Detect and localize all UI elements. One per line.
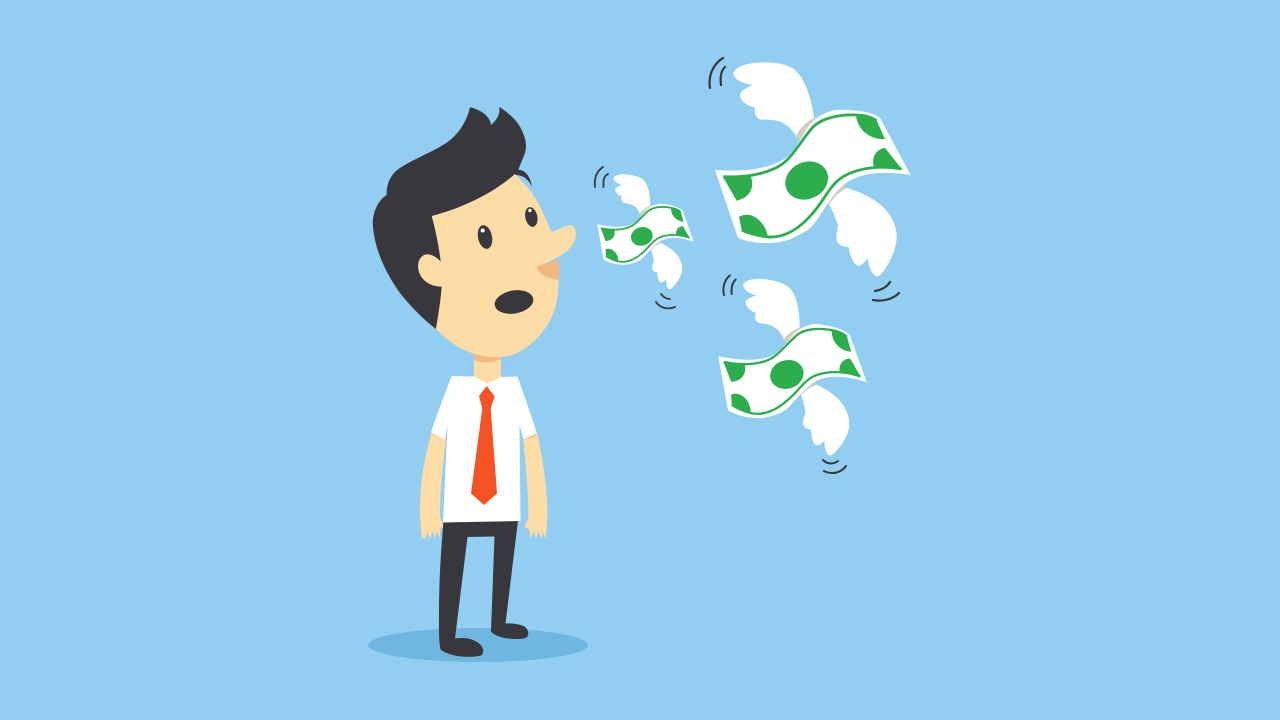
banknote paper xyxy=(592,194,699,275)
banknote centre oval xyxy=(779,154,834,207)
ground shadow xyxy=(368,628,588,662)
lower wing xyxy=(646,241,686,291)
banknote paper xyxy=(715,110,911,243)
neck shadow xyxy=(474,354,501,363)
lower wing xyxy=(793,382,855,458)
motion lines xyxy=(595,167,675,308)
wing joints xyxy=(796,118,847,206)
lower wing xyxy=(829,187,897,276)
man xyxy=(373,107,576,657)
banknote border xyxy=(717,315,867,428)
mouth xyxy=(493,287,535,317)
ear xyxy=(418,254,447,287)
banknote corners xyxy=(596,198,694,272)
banknote corners xyxy=(717,316,867,428)
wing joints xyxy=(634,205,666,252)
small flying banknote xyxy=(589,167,702,308)
nose shadow xyxy=(537,260,559,280)
hair xyxy=(373,107,526,329)
face xyxy=(432,174,576,357)
upper wing xyxy=(736,276,806,343)
banknote border xyxy=(596,198,694,272)
hair curl xyxy=(512,170,532,187)
shirt xyxy=(431,376,537,522)
upper wing xyxy=(733,62,814,138)
right eye xyxy=(523,206,539,228)
wing joints xyxy=(775,326,825,398)
motion lines xyxy=(723,276,846,473)
motion lines xyxy=(710,58,899,301)
banknote centre oval xyxy=(629,224,655,248)
trousers and shoes xyxy=(439,520,528,657)
left eye xyxy=(476,224,494,250)
sleeve shading xyxy=(431,432,537,440)
neck xyxy=(474,350,501,384)
banknote corners xyxy=(723,116,902,237)
tie xyxy=(471,386,497,505)
banknote centre oval xyxy=(767,356,807,393)
banknote border xyxy=(723,115,902,237)
banknote paper xyxy=(710,310,874,434)
right arm xyxy=(523,434,548,539)
left arm xyxy=(420,433,446,539)
medium flying banknote xyxy=(706,274,879,473)
large flying banknote xyxy=(710,58,911,301)
upper wing xyxy=(609,172,655,216)
